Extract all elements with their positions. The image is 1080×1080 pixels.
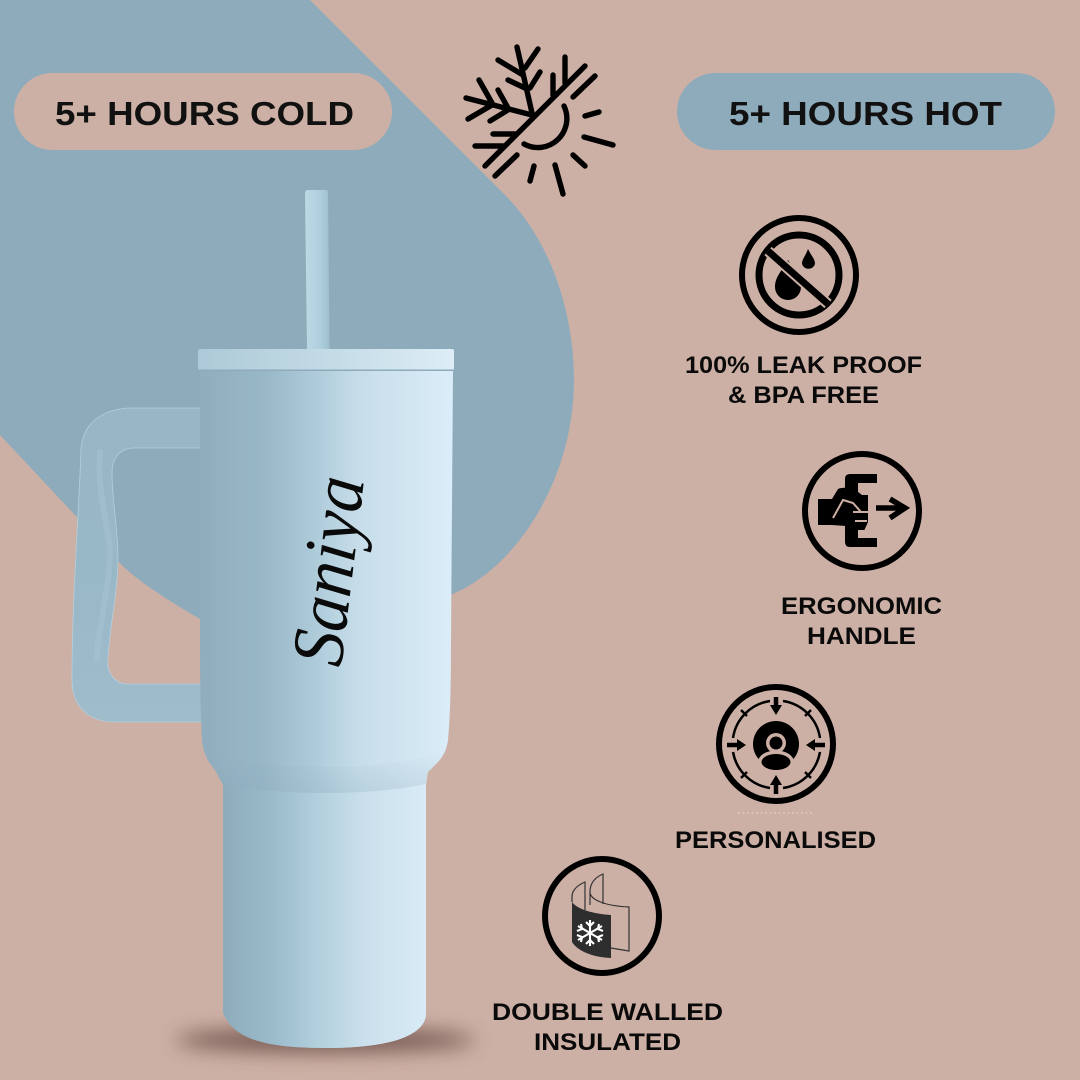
label: ergonomic: ERGONOMIC [781, 593, 942, 620]
icon: snowflake and sun [466, 47, 613, 194]
handle [72, 408, 202, 722]
label: insulated: INSULATED [534, 1029, 681, 1056]
pill: 5+ hours cold: 5+ HOURS COLD [55, 95, 354, 132]
icon: hand gripping handle [805, 454, 919, 568]
feature: ergonomic handle [781, 454, 942, 650]
label: personalised: PERSONALISED [675, 827, 876, 854]
icon: person with target [719, 687, 833, 801]
label: leak proof: 100% LEAK PROOF [685, 352, 922, 379]
feature: personalised [675, 687, 876, 854]
tumbler body and base [200, 370, 453, 1048]
feature: double walled [492, 859, 723, 1056]
name engraving: Saniya [276, 471, 381, 670]
straw [305, 190, 330, 349]
base shoulder shade [205, 752, 445, 793]
tumbler shadow [175, 1028, 475, 1052]
pill: 5+ hours cold [14, 73, 392, 150]
blue blob shape [0, 0, 574, 634]
pill: 5+ hours hot: 5+ HOURS HOT [729, 95, 1002, 132]
label: handle: HANDLE [807, 623, 916, 650]
icon: double wall with snowflake [545, 859, 659, 973]
feature: leak proof [685, 218, 922, 409]
label: double walled: DOUBLE WALLED [492, 999, 723, 1026]
tumbler [72, 190, 454, 1048]
lid [198, 349, 454, 371]
icon: no leak drops [742, 218, 856, 332]
pill: 5+ hours hot [677, 73, 1055, 150]
label: bpa free: & BPA FREE [728, 382, 879, 409]
